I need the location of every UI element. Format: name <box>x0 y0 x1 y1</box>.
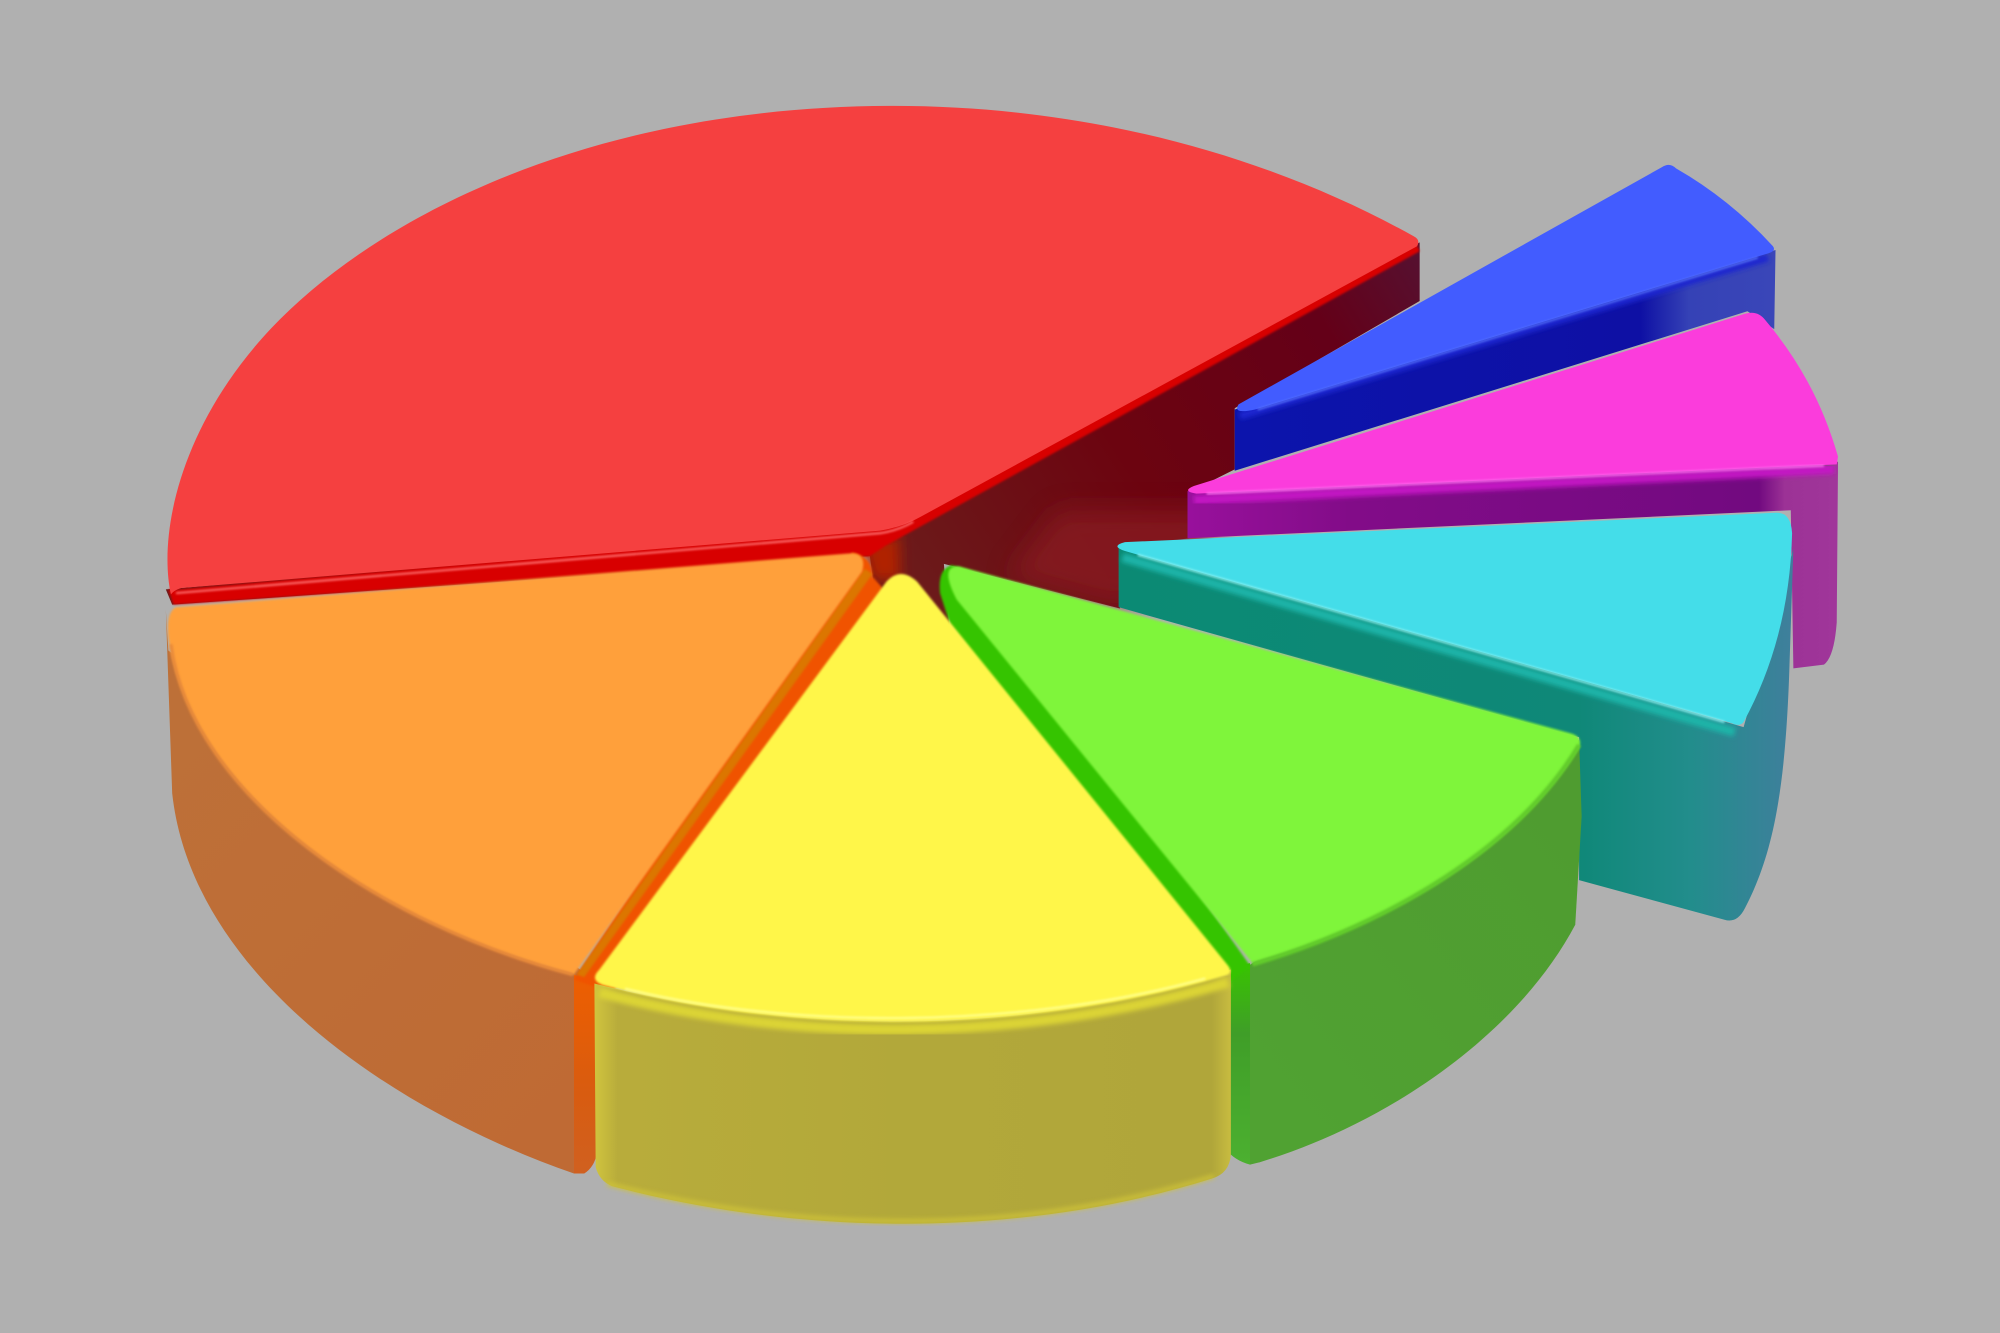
orange slice inner edge <box>574 552 893 992</box>
blue slice top face <box>1237 165 1774 411</box>
slice: red <box>166 106 1420 638</box>
red slice rim highlight <box>176 522 913 593</box>
red slice top face <box>167 106 1418 594</box>
yellow slice rim highlight <box>625 978 1205 1018</box>
slices: blue, magenta, cyan <box>1117 165 1838 920</box>
cyan slice rim highlight <box>1138 555 1724 722</box>
blue slice side face <box>1235 250 1776 471</box>
orange slice side face <box>166 610 594 1174</box>
green slice inner edge <box>940 565 1250 982</box>
red slice lower wall shading <box>1008 510 1224 606</box>
yellow slice rim band <box>599 982 1228 1029</box>
green slice top face <box>948 566 1580 963</box>
yellow slice top face <box>595 574 1230 1022</box>
magenta slice rim highlight <box>1207 466 1824 494</box>
slice: orange <box>166 552 893 1174</box>
magenta slice side face <box>1188 462 1838 668</box>
slice: yellow <box>594 574 1231 1224</box>
orange slice vertical strip <box>574 975 597 1174</box>
blue slice rim highlight <box>1258 258 1758 409</box>
green slice side face <box>1249 740 1582 1165</box>
red slice apex glow <box>862 536 901 580</box>
cyan slice top face <box>1117 513 1792 725</box>
magenta slice edge band <box>1194 469 1834 500</box>
slice: green <box>940 565 1582 1165</box>
green slice rim highlight <box>1253 745 1579 964</box>
red slice bright strip <box>168 242 1420 605</box>
orange slice inner edge shade <box>577 569 872 977</box>
yellow slice side face <box>594 969 1231 1224</box>
red slice inner wall <box>166 242 1420 638</box>
orange slice top face <box>168 553 863 975</box>
magenta slice top face <box>1188 313 1838 494</box>
green slice vertical strip <box>1224 963 1250 1165</box>
cyan slice side face <box>1119 546 1793 920</box>
blue slice edge band <box>1240 258 1768 416</box>
yellow slice bottom rim <box>607 1176 1214 1221</box>
orange slice rim highlight <box>171 644 573 975</box>
cyan slice edge band <box>1122 557 1735 732</box>
